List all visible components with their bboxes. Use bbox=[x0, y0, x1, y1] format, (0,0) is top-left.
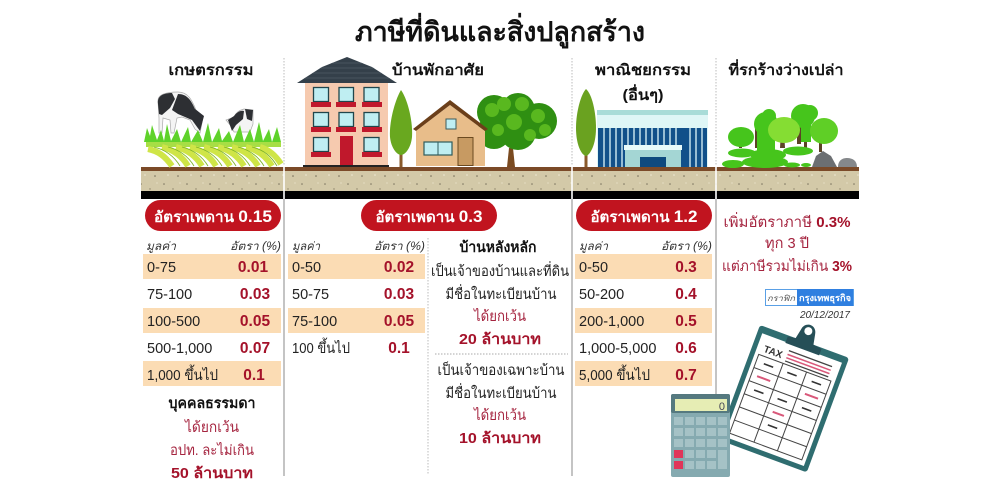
table: residential rates: 0.03 bbox=[384, 286, 414, 303]
heading: agriculture: เกษตรกรรม bbox=[168, 62, 254, 79]
icon: apartment house bbox=[290, 57, 400, 167]
table: residential rates: 100 ขึ้นไป bbox=[292, 337, 350, 357]
source badge bbox=[766, 289, 854, 306]
heading: vacant land: ที่รกร้างว่างเปล่า bbox=[728, 59, 844, 79]
text block: main house exemption: เป็นเจ้าของบ้านและที่ดิน bbox=[431, 261, 569, 280]
text block: main house exemption: ได้ยกเว้น bbox=[473, 406, 526, 424]
table: residential rates: 50-75 bbox=[292, 287, 329, 303]
text block: main house exemption: 20 ล้านบาท bbox=[459, 331, 541, 348]
icon: round tree bbox=[477, 93, 557, 167]
table: commercial rates: 0.3 bbox=[675, 259, 697, 276]
table: agriculture rates: 75-100 bbox=[147, 287, 192, 303]
table: commercial rates: อัตรา (%) bbox=[661, 240, 712, 253]
icon: calculator: 0 bbox=[719, 401, 725, 413]
text block: individual exemption: บุคคลธรรมดา bbox=[168, 396, 256, 412]
table: agriculture rates bbox=[143, 240, 281, 386]
table: agriculture rates: 1,000 ขึ้นไป bbox=[147, 364, 218, 384]
text block: main house exemption: บ้านหลังหลัก bbox=[460, 239, 536, 256]
pill: ceiling rate 0.15: อัตราเพดาน 0.15 bbox=[154, 207, 272, 226]
icon: tax clipboard: TAX bbox=[762, 344, 784, 361]
heading: commercial bbox=[595, 61, 691, 104]
table: agriculture rates: 0.1 bbox=[243, 367, 265, 384]
text block: main house exemption: มีชื่อในทะเบียนบ้าน bbox=[446, 284, 557, 303]
text block: individual exemption bbox=[168, 396, 256, 482]
table: residential rates: 0.1 bbox=[388, 340, 410, 357]
pill: ceiling rate 0.3: อัตราเพดาน 0.3 bbox=[376, 207, 482, 226]
text block: vacant land rule: เพิ่มอัตราภาษี 0.3% bbox=[724, 212, 851, 231]
table: commercial rates: 0.4 bbox=[675, 286, 697, 303]
icon: small cow bbox=[226, 109, 253, 132]
icon: large cow bbox=[158, 92, 204, 133]
date: 20/12/2017 bbox=[799, 310, 850, 321]
text block: main house exemption: ได้ยกเว้น bbox=[473, 307, 526, 325]
icon: small house bbox=[413, 100, 488, 166]
text block: main house exemption: เป็นเจ้าของเฉพาะบ้าน bbox=[438, 360, 565, 379]
table: residential rates bbox=[288, 240, 425, 357]
icon: poplar tree bbox=[390, 90, 412, 167]
table: commercial rates: 0-50 bbox=[579, 260, 608, 276]
heading: commercial: พาณิชยกรรม bbox=[595, 61, 691, 79]
pill: ceiling rate 0.15 bbox=[145, 200, 281, 231]
table: agriculture rates: 0.01 bbox=[238, 259, 268, 276]
table: commercial rates: 0.6 bbox=[675, 340, 697, 357]
icon: office building bbox=[597, 110, 708, 167]
text block: vacant land rule: ทุก 3 ปี bbox=[765, 235, 809, 252]
text block: main house exemption bbox=[431, 239, 569, 447]
table: commercial rates: 0.5 bbox=[675, 313, 697, 330]
table: agriculture rates: 0.07 bbox=[240, 340, 270, 357]
icon: green trees bbox=[722, 104, 838, 168]
text block: main house exemption: มีชื่อในทะเบียนบ้าน bbox=[446, 383, 557, 402]
table: residential rates: อัตรา (%) bbox=[374, 240, 425, 253]
table: commercial rates: มูลค่า bbox=[579, 241, 609, 253]
pill: ceiling rate 0.3 bbox=[361, 200, 497, 231]
text block: individual exemption: ได้ยกเว้น bbox=[184, 418, 239, 436]
table: commercial rates: 200-1,000 bbox=[579, 314, 644, 330]
table: agriculture rates: 500-1,000 bbox=[147, 341, 212, 357]
table: agriculture rates: อัตรา (%) bbox=[230, 240, 281, 253]
table: agriculture rates: 0.05 bbox=[240, 313, 270, 330]
panel: vacant land illustration bbox=[722, 104, 857, 168]
heading: residential: บ้านพักอาศัย bbox=[392, 62, 484, 79]
panel: commercial illustration bbox=[576, 89, 708, 167]
table: residential rates: 0.05 bbox=[384, 313, 414, 330]
table: residential rates: 0-50 bbox=[292, 260, 321, 276]
pill: ceiling rate 1.2 bbox=[576, 200, 712, 231]
table: residential rates: 0.02 bbox=[384, 259, 414, 276]
table: commercial rates: 50-200 bbox=[579, 287, 624, 303]
table: commercial rates: 1,000-5,000 bbox=[579, 341, 656, 357]
source badge: กราฟิก bbox=[767, 294, 796, 303]
icon: tax clipboard bbox=[718, 309, 855, 472]
icon: rocks bbox=[812, 151, 857, 167]
table: agriculture rates: มูลค่า bbox=[146, 241, 177, 253]
table: commercial rates bbox=[575, 240, 712, 386]
pill: ceiling rate 1.2: อัตราเพดาน 1.2 bbox=[590, 207, 698, 226]
table: agriculture rates: 0-75 bbox=[147, 260, 176, 276]
text block: vacant land rule bbox=[722, 212, 852, 275]
text block: individual exemption: อปท. ละไม่เกิน bbox=[170, 441, 254, 459]
panel: residential illustration bbox=[290, 57, 557, 167]
icon: rice field bbox=[144, 122, 281, 166]
table: commercial rates: 0.7 bbox=[675, 367, 697, 384]
panel: agriculture illustration bbox=[144, 92, 281, 166]
table: residential rates: 75-100 bbox=[292, 314, 337, 330]
table: commercial rates: 5,000 ขึ้นไป bbox=[579, 364, 650, 384]
table: agriculture rates: 0.03 bbox=[240, 286, 270, 303]
text block: vacant land rule: แต่ภาษีรวมไม่เกิน 3% bbox=[722, 257, 852, 275]
source badge: กรุงเทพธุรกิจ bbox=[799, 293, 851, 304]
icon: calculator bbox=[671, 394, 730, 477]
ground strip bbox=[141, 167, 859, 199]
title: ภาษีที่ดินและสิ่งปลูกสร้าง bbox=[355, 12, 645, 49]
icon: poplar tree commercial bbox=[576, 89, 596, 167]
column dividers bbox=[284, 58, 716, 476]
heading: commercial: (อื่นๆ) bbox=[622, 84, 664, 104]
table: residential rates: มูลค่า bbox=[292, 241, 321, 253]
table: agriculture rates: 100-500 bbox=[147, 314, 200, 330]
text block: individual exemption: 50 ล้านบาท bbox=[171, 465, 253, 482]
text block: main house exemption: 10 ล้านบาท bbox=[459, 430, 541, 447]
